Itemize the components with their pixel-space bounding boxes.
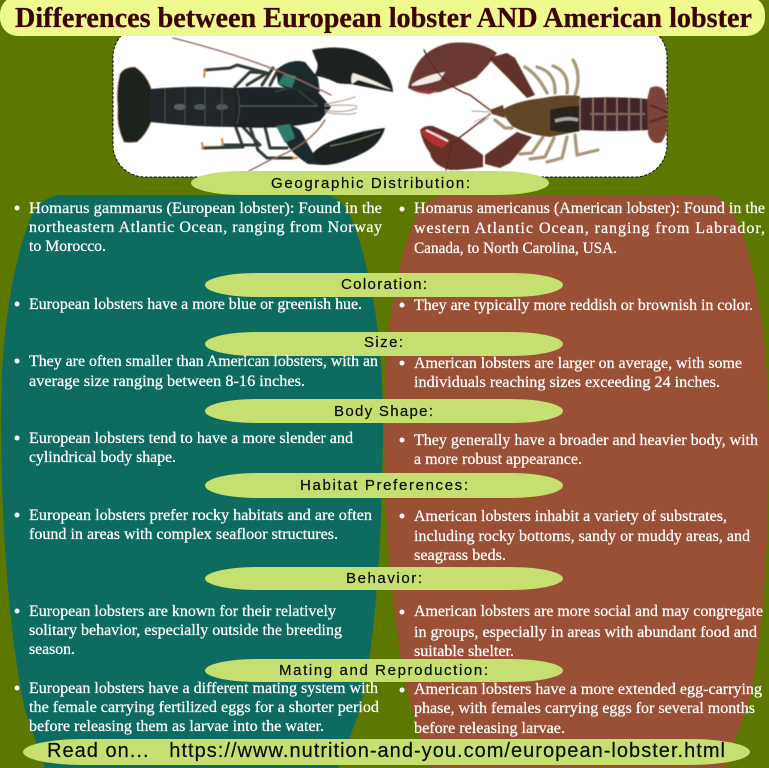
text: American size <box>400 355 742 391</box>
heading: Mating and Reproduction: Mating and Reproduction: <box>279 662 488 679</box>
text: American mating: American lobsters have a more extended egg-carrying <box>414 681 762 698</box>
illustration: European lobster <box>117 38 393 171</box>
text: American habitat: seagrass beds. <box>414 547 506 564</box>
text: European mating <box>14 680 379 735</box>
text: European size <box>14 353 378 390</box>
text: American size: American lobsters are larger on average, with some <box>414 355 742 372</box>
title text: Differences between European lobster AND American lobster <box>15 3 752 34</box>
text: European mating: European lobsters have a different mating system with <box>29 680 378 697</box>
heading: Size <box>205 332 563 356</box>
text: European behavior <box>14 603 342 658</box>
text: European body shape: cylindrical body shape. <box>29 449 176 466</box>
heading: Mating and Reproduction <box>205 659 563 682</box>
text: European behavior: season. <box>29 641 75 658</box>
panel: lobster illustration frame <box>113 25 667 177</box>
panel: American lobster background shape <box>384 195 769 768</box>
text: American geographic distribution <box>400 200 765 257</box>
text: European body shape <box>14 430 353 466</box>
heading: Behavior <box>205 567 563 590</box>
text: European geographic distribution: to Morocco. <box>29 238 106 255</box>
text: European behavior: European lobsters are known for their relatively <box>29 603 336 620</box>
text: American habitat <box>400 508 750 564</box>
text: American body shape: They generally have a broader and heavier body, with <box>414 432 758 449</box>
text: European size: They are often smaller than American lobsters, with an <box>29 353 378 370</box>
text: European size: average size ranging between 8-16 inches. <box>29 373 305 390</box>
text: European habitat: found in areas with complex seafloor structures. <box>29 526 338 543</box>
heading: Habitat Preferences: Habitat Preferences: <box>300 477 468 494</box>
text: American coloration: They are typically more reddish or brownish in color. <box>414 297 753 314</box>
text: American mating: phase, with females carrying eggs for several months <box>414 700 755 717</box>
footer link banner: Read on... https://www.nutrition-and-you.com/european-lobster.html <box>47 740 725 762</box>
heading: Behavior: Behavior: <box>346 570 422 587</box>
heading: Coloration: Coloration: <box>341 276 427 293</box>
text: American behavior: suitable shelter. <box>414 643 514 660</box>
text: European mating: before releasing them as larvae into the water. <box>29 718 324 735</box>
text: European behavior: solitary behavior, especially outside the breeding <box>29 622 342 639</box>
text: European coloration: European lobsters have a more blue or greenish hue. <box>29 296 362 313</box>
text: American geographic distribution: western Atlantic Ocean, ranging from Labrador, <box>414 220 765 237</box>
text: American mating <box>400 681 762 737</box>
text: European habitat <box>14 507 372 543</box>
text: American size: individuals reaching sizes exceeding 24 inches. <box>414 374 720 391</box>
heading: Coloration <box>205 273 563 297</box>
text: American geographic distribution: Canada, to North Carolina, USA. <box>414 240 617 257</box>
heading: Geographic Distribution <box>191 171 549 195</box>
heading: Body Shape <box>205 399 563 423</box>
text: American habitat: American lobsters inhabit a variety of substrates, <box>414 508 727 525</box>
illustration: American lobster <box>408 42 667 170</box>
text: European habitat: European lobsters prefer rocky habitats and are often <box>29 507 372 524</box>
text: European geographic distribution: northeastern Atlantic Ocean, ranging from Norway <box>29 219 382 236</box>
text: European geographic distribution <box>14 200 382 255</box>
heading: Habitat Preferences <box>205 473 563 498</box>
text: American mating: before releasing larvae. <box>414 720 565 737</box>
text: American body shape <box>400 432 758 468</box>
text: European body shape: European lobsters tend to have a more slender and <box>29 430 353 447</box>
heading: Size: Size: <box>364 334 403 351</box>
text: European mating: the female carrying fertilized eggs for a shorter period <box>29 699 379 716</box>
panel: European lobster background shape <box>1 195 383 768</box>
text: American behavior <box>400 603 763 660</box>
title banner <box>0 0 765 36</box>
text: American behavior: American lobsters are more social and may congregate <box>414 603 763 620</box>
text: American geographic distribution: Homarus americanus (American lobster): Found in the <box>414 200 765 217</box>
text: American behavior: in groups, especially in areas with abundant food and <box>414 624 757 641</box>
heading: Geographic Distribution: Geographic Distribution: <box>271 175 470 192</box>
text: European geographic distribution: Homarus gammarus (European lobster): Found in the <box>29 200 382 217</box>
text: American habitat: including rocky bottoms, sandy or muddy areas, and <box>414 528 750 545</box>
text: American body shape: a more robust appearance. <box>414 451 582 468</box>
heading: Body Shape: Body Shape: <box>334 403 433 420</box>
